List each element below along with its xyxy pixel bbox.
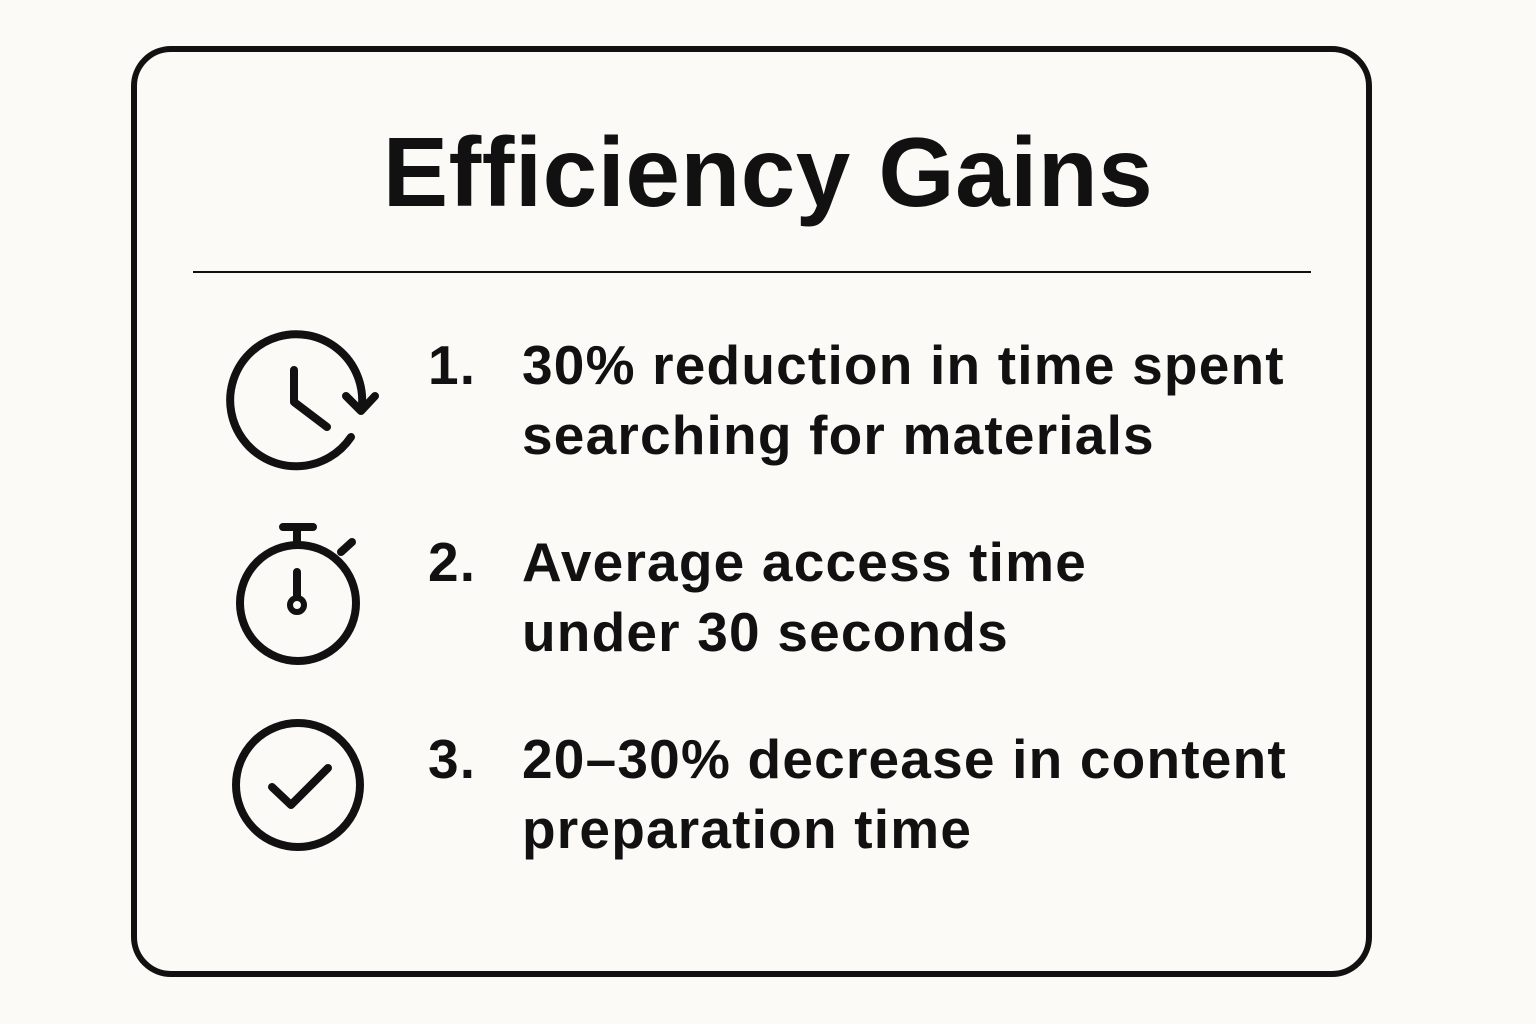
text: Average access time — [522, 531, 1087, 593]
icon: check circle — [236, 723, 360, 847]
item 1 — [428, 334, 1285, 466]
text: 3. — [428, 728, 476, 790]
text: 2. — [428, 531, 476, 593]
icon: clock with arrow — [230, 334, 375, 466]
title: Efficiency Gains — [383, 117, 1153, 227]
text: 30% reduction in time spent — [522, 334, 1285, 396]
text: 1. — [428, 334, 476, 396]
item 3 — [428, 728, 1287, 860]
item 2 — [428, 531, 1087, 663]
icon: stopwatch — [240, 527, 356, 661]
text: 20–30% decrease in content — [522, 728, 1287, 790]
text: searching for materials — [522, 404, 1155, 466]
text: preparation time — [522, 798, 972, 860]
panel: card — [131, 46, 1372, 977]
text: under 30 seconds — [522, 601, 1009, 663]
